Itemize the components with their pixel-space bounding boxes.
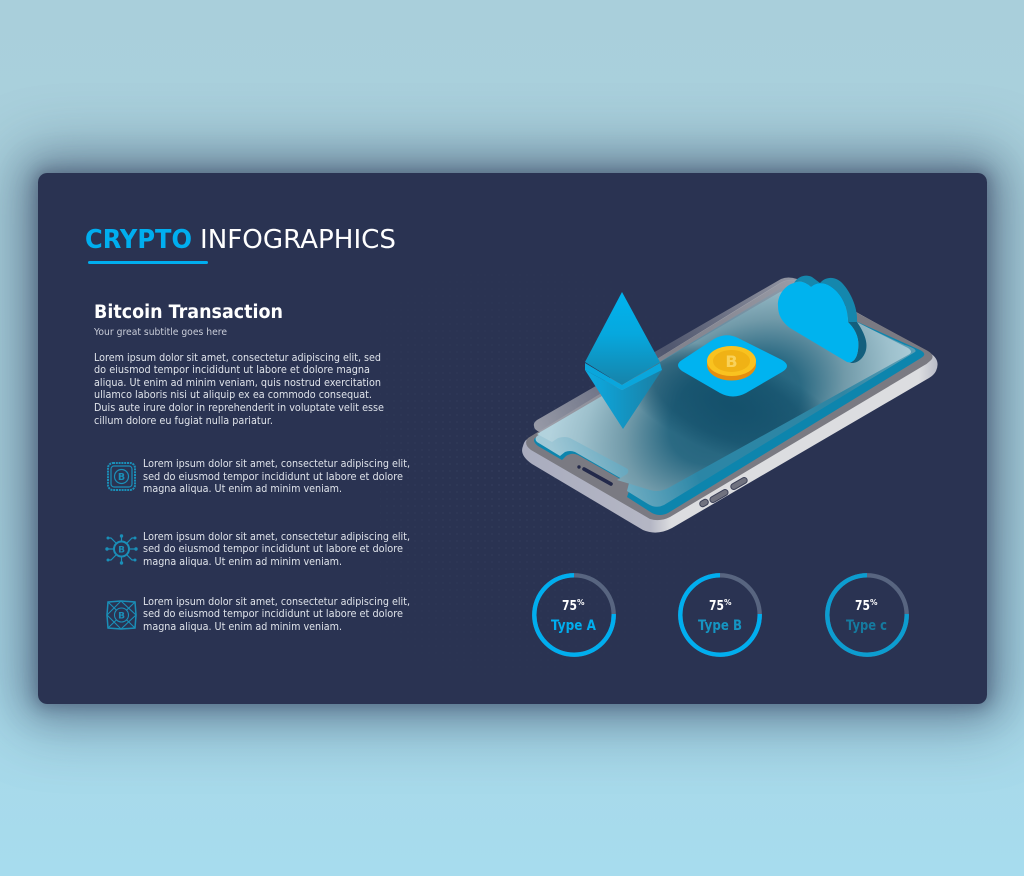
intro paragraph	[94, 353, 384, 427]
text block 2: Lorem ipsum dolor sit amet, consectetur adipiscing elit,	[143, 532, 410, 543]
intro paragraph: Duis aute irure dolor in reprehenderit in voluptate velit esse	[94, 403, 384, 414]
donut: Type c: %	[870, 598, 878, 607]
text block 1: Lorem ipsum dolor sit amet, consectetur adipiscing elit,	[143, 459, 410, 470]
donut: Type c: 75	[855, 598, 870, 614]
icon: bitcoin chip: B	[118, 472, 125, 483]
title underline	[88, 261, 208, 264]
phone grey bezel	[526, 280, 933, 520]
donut: Type B	[680, 575, 760, 655]
text block 1: sed do eiusmod tempor incididunt ut labore et dolore	[143, 472, 403, 483]
icon: bitcoin coin	[707, 346, 756, 380]
text block 2: magna aliqua. Ut enim ad minim veniam.	[143, 557, 342, 568]
dotted background texture	[380, 324, 646, 618]
side buttons	[699, 476, 748, 508]
phone illustration	[522, 276, 938, 533]
text block 3: sed do eiusmod tempor incididunt ut labore et dolore	[143, 609, 403, 620]
text block 1	[143, 459, 410, 495]
donut: Type c	[827, 575, 907, 655]
icon: bitcoin mesh	[107, 601, 136, 629]
translucent back frame	[534, 278, 815, 435]
screen surface	[536, 288, 916, 507]
icon: bitcoin network	[105, 534, 138, 565]
speaker	[584, 469, 611, 484]
intro paragraph: aliqua. Ut enim ad minim veniam, quis nostrud exercitation	[94, 378, 381, 389]
text block 3	[143, 597, 410, 633]
donut: Type B: Type B	[698, 618, 742, 634]
intro paragraph: ullamco laboris nisi ut aliquip ex ea commodo consequat.	[94, 390, 372, 401]
intro paragraph: cillum dolore eu fugiat nulla pariatur.	[94, 416, 273, 427]
heading: Bitcoin Transaction	[94, 302, 283, 323]
icon: ethereum diamond	[585, 292, 662, 429]
intro paragraph: Lorem ipsum dolor sit amet, consectetur adipiscing elit, sed	[94, 353, 381, 364]
camera dot	[577, 465, 581, 469]
icon: bitcoin chip	[108, 463, 135, 490]
donut: Type B: 75	[709, 598, 724, 614]
icon: app tile	[678, 335, 787, 396]
title: INFOGRAPHICS	[200, 225, 396, 255]
donut: Type B: %	[724, 598, 732, 607]
icon: bitcoin coin: B	[725, 352, 738, 371]
text block 3: Lorem ipsum dolor sit amet, consectetur adipiscing elit,	[143, 597, 410, 608]
main panel	[38, 173, 987, 704]
subtitle: Your great subtitle goes here	[93, 327, 227, 338]
phone silver body	[522, 280, 938, 533]
text block 2: sed do eiusmod tempor incididunt ut labore et dolore	[143, 544, 403, 555]
title: CRYPTO	[85, 225, 192, 255]
icon: cloud	[778, 276, 867, 363]
blue screen rim	[534, 288, 924, 515]
donut: Type A	[534, 575, 614, 655]
intro paragraph: do eiusmod tempor incididunt ut labore et dolore magna	[94, 365, 370, 376]
donut: Type A: 75	[562, 598, 577, 614]
glass screen	[537, 290, 911, 491]
glass dark shadow	[628, 344, 817, 450]
title	[85, 225, 396, 255]
icon: bitcoin mesh: B	[118, 612, 125, 622]
donut: Type A: %	[577, 598, 585, 607]
donut: Type A: Type A	[551, 618, 597, 634]
panel shadow	[38, 173, 987, 704]
icon: bitcoin network: B	[118, 546, 125, 556]
text block 3: magna aliqua. Ut enim ad minim veniam.	[143, 622, 342, 633]
donut: Type c: Type c	[846, 618, 887, 634]
text block 2	[143, 532, 410, 568]
text block 1: magna aliqua. Ut enim ad minim veniam.	[143, 484, 342, 495]
